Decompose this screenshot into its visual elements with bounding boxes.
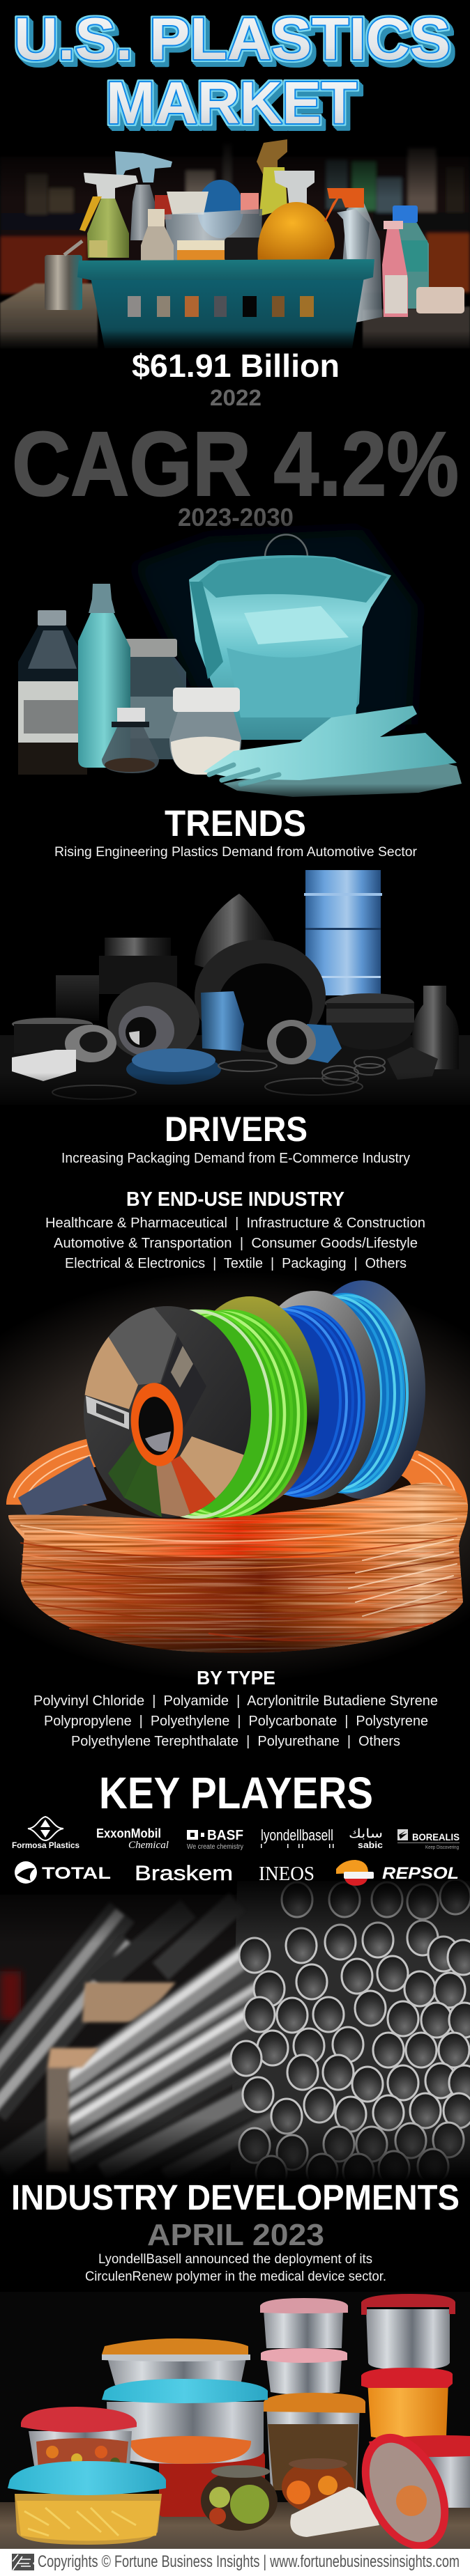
panel: medical plastics photo [0, 529, 470, 805]
logo: ExxonMobil Chemical: ExxonMobil [96, 1826, 161, 1840]
orange hub ring [127, 1380, 187, 1469]
logo: Braskem: Braskem [135, 1862, 233, 1885]
logo: Formosa Plastics: Formosa Plastics [12, 1842, 79, 1850]
left red tint [0, 1971, 21, 2020]
logo: LyondellBasell: lyondellbasell [261, 1826, 333, 1844]
o-rings and small fittings [52, 1057, 385, 1099]
hub inner highlight [145, 1431, 171, 1452]
open red lid [344, 2420, 466, 2563]
pipe bodies [59, 1950, 287, 2179]
logo: ExxonMobil Chemical: Chemical [128, 1840, 169, 1851]
right bowl [325, 993, 414, 1050]
yellow spray bottle [257, 139, 287, 216]
segment list: Automotive & Transportation | Consumer Goods/Lifestyle [54, 1236, 418, 1251]
logo: SABIC: sabic [358, 1840, 383, 1850]
segment heading: BY END-USE INDUSTRY [126, 1188, 344, 1211]
blue cap bottle [393, 205, 429, 309]
coil base shadow [21, 1560, 463, 1653]
title: U.S. PLASTICS MARKET: MARKET [106, 70, 357, 137]
logo: Total [15, 1861, 111, 1884]
panel: filament spools photo [0, 1271, 470, 1682]
logo: Repsol [336, 1860, 459, 1886]
section fade [0, 1073, 470, 1112]
panel: industrial black and blue plastics photo [0, 870, 470, 1112]
wood plank upper [82, 1983, 176, 2022]
pipe ends [231, 1879, 470, 2191]
logo: ExxonMobil Chemical [96, 1826, 169, 1851]
backdrop [0, 2292, 470, 2504]
white bristles [167, 192, 209, 215]
medical bag [189, 555, 391, 740]
title: U.S. PLASTICS MARKET: U.S. PLASTICS [14, 6, 450, 72]
grey bucket [165, 209, 262, 262]
panel: hero household plastics photo [0, 139, 470, 352]
logo: Borealis [397, 1829, 460, 1850]
barcode detail [171, 1346, 193, 1388]
white towel [290, 2487, 379, 2537]
coil inner shadow [63, 1452, 411, 1522]
pipe stack backing [230, 1881, 470, 2180]
development description: LyondellBasell announced the deployment of its [98, 2251, 372, 2267]
front ring [107, 982, 199, 1060]
blurred background pipes [0, 1902, 237, 2166]
segment list: Electrical & Electronics | Textile | Packaging | Others [65, 1256, 407, 1271]
container: top right red [361, 2294, 455, 2370]
segment list: Polyethylene Terephthalate | Polyurethane | Others [71, 1734, 400, 1749]
small glass jar [102, 708, 159, 773]
white lid jar [169, 688, 241, 775]
development description: CirculenRenew polymer in the medical device sector. [85, 2269, 386, 2284]
logo: Total: TOTAL [42, 1864, 111, 1883]
logo: BASF: We create chemistry [187, 1843, 243, 1851]
small cylinder [56, 975, 99, 1021]
pink tub [241, 193, 259, 214]
segment: by end-use industry [45, 1188, 425, 1271]
panel: footer [0, 2549, 470, 2576]
left dark backdrop [0, 1895, 251, 2180]
blue back disc [300, 1280, 425, 1499]
container: cyan lid large [102, 2379, 268, 2464]
dark fitting right [387, 1047, 438, 1080]
container: red base [159, 2452, 265, 2517]
development date: APRIL 2023 [147, 2218, 324, 2252]
logo: SABIC: سابك [349, 1826, 383, 1841]
wooden table [0, 2502, 470, 2549]
wood plank lower with post [47, 2048, 99, 2172]
segment list: Healthcare & Pharmaceutical | Infrastructure & Construction [45, 1216, 425, 1231]
logo: SABIC [349, 1826, 383, 1850]
market size value: $61.91 Billion [132, 348, 340, 384]
blurred kitchen background [0, 143, 470, 294]
olive flange [180, 1296, 319, 1508]
teal spray bottle [115, 151, 172, 240]
glass jar with green fruit [201, 2465, 278, 2531]
orange coil back [6, 1438, 468, 1508]
coil body [8, 1482, 468, 1653]
floor [0, 1035, 470, 1105]
large black ring [195, 940, 326, 1053]
segment: by type [33, 1667, 438, 1749]
panel: food containers photo [0, 2292, 470, 2563]
warm backdrop glow [0, 1271, 470, 1682]
logo: Formosa Plastics [12, 1817, 79, 1850]
back cylinder [99, 938, 177, 994]
blue drum [304, 870, 382, 995]
footer bar [0, 2549, 470, 2576]
white box [12, 1050, 76, 1081]
lower black cover [0, 2180, 470, 2201]
blue disc [197, 180, 243, 238]
glass jar behind [121, 639, 186, 759]
container: orange lid with beans [264, 2393, 365, 2490]
icon: Fortune Business Insights logo [12, 2554, 34, 2570]
left wide lid [12, 1018, 93, 1053]
bag backdrop glow [132, 529, 418, 724]
basket holes [128, 296, 314, 317]
logo: INEOS: INEOS [259, 1863, 314, 1885]
yellow helmet [257, 202, 335, 262]
bright lit coil band [8, 1482, 468, 1558]
small grey ring [65, 1025, 116, 1062]
black card under spool [18, 1456, 107, 1517]
segment list: Polypropylene | Polyethylene | Polycarbonate | Polystyrene [44, 1714, 428, 1729]
orange jar [282, 2458, 354, 2513]
heading: key players: KEY PLAYERS [99, 1768, 373, 1818]
container: back right red [369, 2435, 470, 2508]
lower fade [0, 2118, 470, 2180]
big clear bottle [339, 200, 382, 323]
panel: pipes photo [0, 1874, 470, 2201]
silver flange [248, 1291, 380, 1500]
pink bottle [382, 221, 408, 317]
white spray head [274, 171, 314, 209]
panel: company logos [12, 1817, 460, 1886]
front spool disc [82, 1303, 252, 1520]
blue band [201, 991, 244, 1051]
cyan filament [264, 1294, 407, 1492]
lower fade [0, 331, 470, 352]
grey bottle [412, 986, 459, 1069]
heading: trends: TRENDS [165, 803, 306, 844]
background fade to black [0, 139, 470, 199]
segment list [45, 1216, 425, 1271]
logo: BASF: BASF [207, 1828, 243, 1843]
table surface [0, 284, 98, 348]
drivers description: Increasing Packaging Demand from E-Commerce Industry [61, 1151, 410, 1166]
logo: Repsol: REPSOL [382, 1864, 459, 1883]
segment heading: BY TYPE [197, 1667, 275, 1689]
black box [225, 238, 271, 262]
segment list [33, 1693, 438, 1749]
blue filament [215, 1307, 364, 1496]
container: red cap orange [361, 2368, 453, 2441]
logo: BASF [187, 1828, 243, 1851]
development description [85, 2251, 386, 2284]
hub hole [136, 1395, 176, 1457]
teal bottle [78, 584, 130, 768]
metal cup [45, 241, 82, 310]
container: top pink [260, 2298, 348, 2348]
title: U.S. PLASTICS MARKET [14, 6, 450, 137]
heading: drivers: DRIVERS [165, 1110, 308, 1149]
teal basket [77, 259, 374, 348]
container: orange lid left [102, 2338, 250, 2388]
orange-top jar [177, 240, 225, 262]
blue stacked disc [126, 1048, 221, 1085]
bag handle [265, 534, 308, 557]
container: small red with vegetables [21, 2407, 137, 2476]
green filament [120, 1311, 305, 1517]
olive spray bottle [79, 173, 138, 258]
white box [416, 287, 464, 313]
base year: 2022 [210, 385, 261, 410]
coil windings [21, 1519, 460, 1640]
clear spray with orange head [325, 188, 370, 262]
section fade [0, 784, 470, 805]
trends description: Rising Engineering Plastics Demand from Automotive Sector [54, 845, 418, 860]
disc wedges [82, 1303, 252, 1520]
upper fade [0, 1874, 470, 1943]
label window [86, 1396, 129, 1429]
segment list: Polyvinyl Chloride | Polyamide | Acrylonitrile Butadiene Styrene [33, 1693, 438, 1709]
black elbow fitting [195, 894, 278, 975]
container: second pink [261, 2348, 347, 2395]
dark bottle [18, 610, 87, 775]
coil strand texture [0, 1484, 470, 1658]
small ring with blue sleeve [267, 1020, 342, 1064]
logo: Borealis: Keep Discovering [425, 1845, 459, 1850]
gloves [204, 706, 462, 797]
small white bottle [141, 209, 174, 262]
forecast period: 2023-2030 [178, 503, 294, 532]
container: cyan lid with pasta [8, 2461, 166, 2545]
logo: LyondellBasell [261, 1826, 333, 1848]
logo: Borealis: BOREALIS [412, 1832, 460, 1842]
red box [155, 195, 172, 219]
